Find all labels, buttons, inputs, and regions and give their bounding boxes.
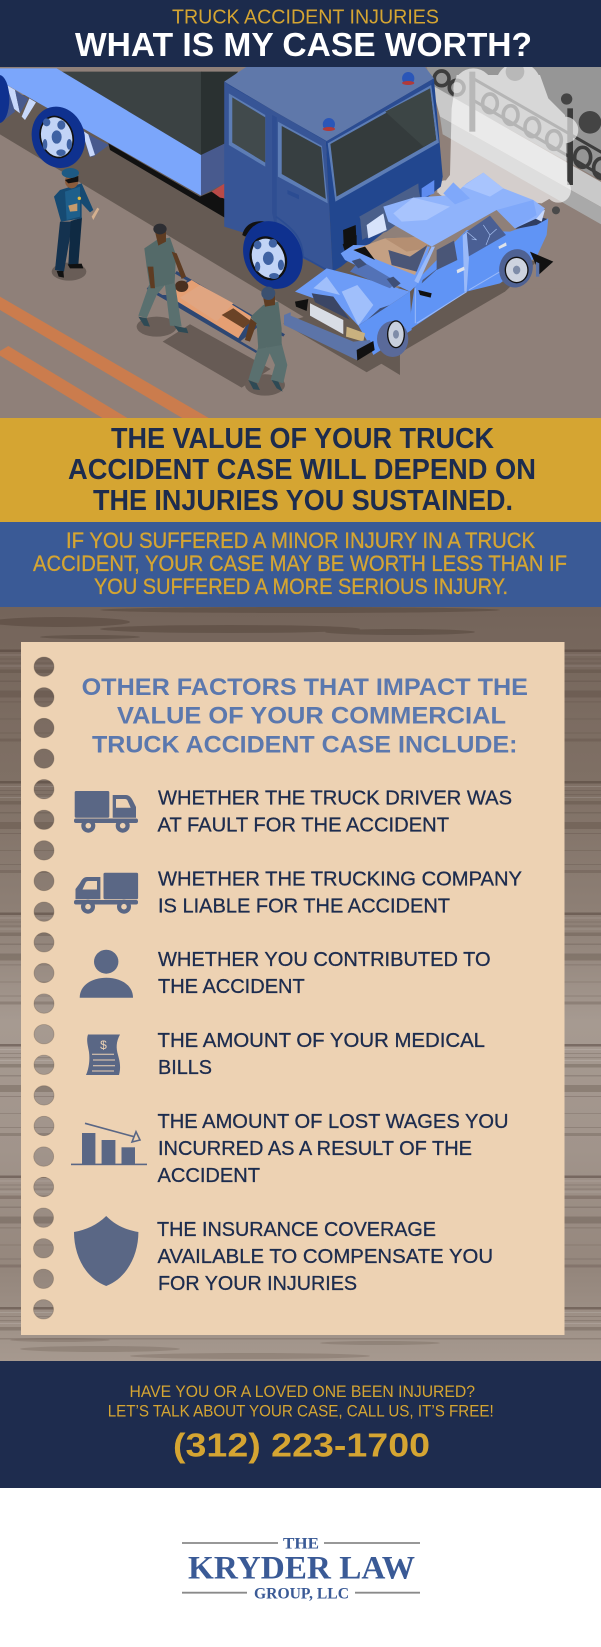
callout line 1: THE VALUE OF YOUR TRUCK — [111, 423, 494, 455]
smoke cloud — [437, 62, 578, 203]
police officer — [54, 168, 99, 278]
icon: person — [80, 950, 133, 998]
icon: medical bill — [86, 1034, 120, 1075]
white footer — [0, 1488, 601, 1647]
logo: the kryder law group — [182, 1536, 420, 1603]
header kicker: truck accident injuries: TRUCK ACCIDENT INJURIES — [172, 6, 439, 28]
callout line 2: ACCIDENT CASE WILL DEPEND ON — [68, 454, 536, 486]
item 4 text: THE AMOUNT OF YOUR MEDICAL — [158, 1030, 485, 1052]
item 6 text: FOR YOUR INJURIES — [158, 1273, 357, 1295]
item 2 text: WHETHER THE TRUCKING COMPANY — [158, 868, 522, 890]
paramedic at the foot of the stretcher — [245, 287, 287, 392]
item 2 text: IS LIABLE FOR THE ACCIDENT — [158, 895, 450, 917]
panel heading: other factors: TRUCK ACCIDENT CASE INCLUDE: — [92, 732, 518, 759]
phone number: (312) 223-1700 — [173, 1428, 430, 1465]
explanation line 3: YOU SUFFERED A MORE SERIOUS INJURY. — [94, 574, 508, 599]
explanation line 1: IF YOU SUFFERED A MINOR INJURY IN A TRUCK — [66, 528, 535, 553]
wall, fence and smoke — [427, 67, 601, 224]
icon: delivery truck facing right — [74, 791, 138, 833]
explanation line 2: ACCIDENT, YOUR CASE MAY BE WORTH LESS THAN IF — [33, 551, 567, 576]
item 6 text — [157, 1219, 493, 1295]
stretcher with patient — [147, 271, 285, 353]
main title: WHAT IS MY CASE WORTH? — [75, 27, 532, 64]
panel heading: other factors — [82, 674, 528, 759]
item 3 text: WHETHER YOU CONTRIBUTED TO — [158, 949, 491, 971]
item 2 text — [158, 868, 522, 917]
illustration: truck accident scene — [0, 62, 601, 422]
road shadows and road stripes — [0, 95, 400, 422]
item 5 text: ACCIDENT — [158, 1165, 260, 1187]
icon: medical bill: $ — [100, 1038, 107, 1052]
item 1 text: WHETHER THE TRUCK DRIVER WAS — [158, 787, 512, 809]
item 4 text: BILLS — [158, 1057, 212, 1079]
callout line 3: THE INJURIES YOU SUSTAINED. — [93, 485, 513, 517]
logo: the kryder law group: GROUP, LLC — [254, 1586, 349, 1603]
header band — [0, 0, 601, 67]
item 5 text — [158, 1111, 508, 1187]
item 6 text: AVAILABLE TO COMPENSATE YOU — [158, 1246, 493, 1268]
item 4 text — [158, 1030, 485, 1079]
callout band: value depends on injuries — [0, 418, 601, 522]
icon: shield — [74, 1216, 138, 1286]
paramedic at the head of the stretcher — [138, 224, 188, 333]
item 6 text: THE INSURANCE COVERAGE — [157, 1219, 436, 1241]
call to action band — [0, 1361, 601, 1488]
logo: the kryder law group: KRYDER LAW — [188, 1550, 415, 1586]
paper punch hole rims — [34, 657, 54, 1319]
wood background — [0, 607, 601, 1361]
icon: declining bar chart — [71, 1123, 147, 1165]
icon: delivery truck facing left — [74, 873, 138, 914]
item 3 text: THE ACCIDENT — [158, 976, 305, 998]
call to action line 1: HAVE YOU OR A LOVED ONE BEEN INJURED? — [130, 1383, 475, 1401]
panel heading: other factors: OTHER FACTORS THAT IMPACT THE — [82, 674, 528, 701]
blue band: minor injury explanation — [0, 522, 601, 607]
item 5 text: INCURRED AS A RESULT OF THE — [158, 1138, 472, 1160]
call to action line 2: LET’S TALK ABOUT YOUR CASE, CALL US, IT’S FREE! — [108, 1403, 494, 1421]
truck cab — [224, 65, 443, 294]
panel heading: other factors: VALUE OF YOUR COMMERCIAL — [117, 703, 506, 730]
truck trailer — [0, 68, 238, 218]
crashed car — [283, 173, 553, 372]
item 1 text: AT FAULT FOR THE ACCIDENT — [158, 814, 449, 836]
item 1 text — [158, 787, 512, 836]
logo: the kryder law group: THE — [283, 1536, 319, 1552]
notebook paper panel — [21, 642, 564, 1335]
item 3 text — [158, 949, 491, 998]
item 5 text: THE AMOUNT OF LOST WAGES YOU — [158, 1111, 508, 1133]
